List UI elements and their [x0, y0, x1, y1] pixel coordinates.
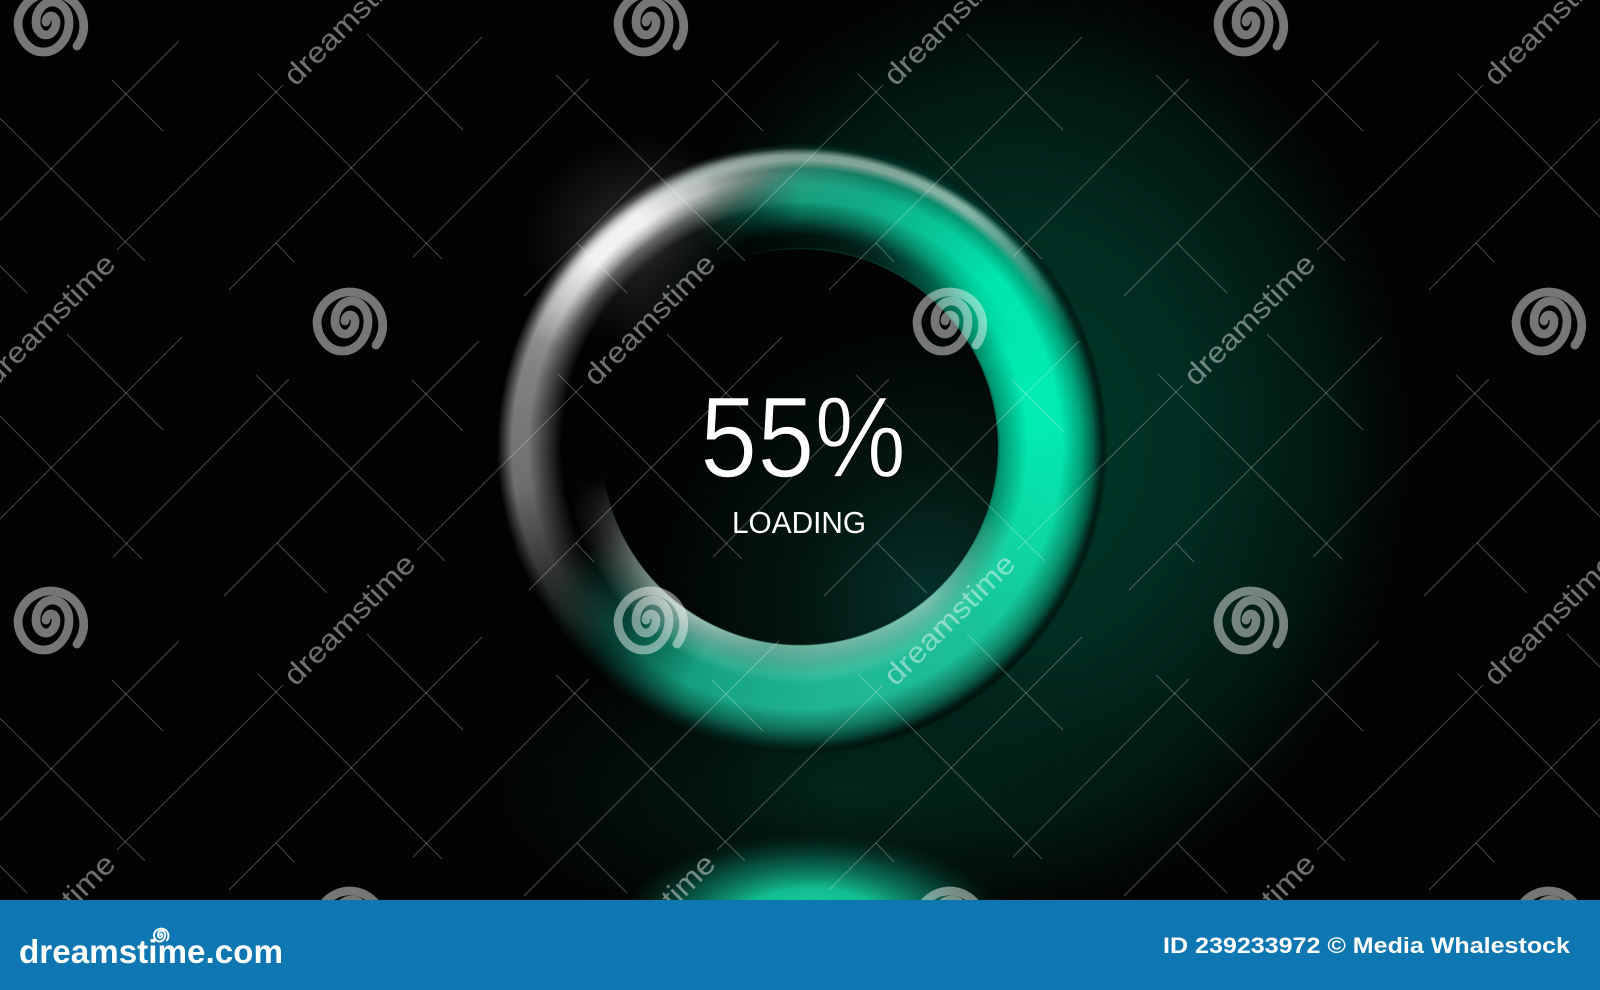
watermark text: dreamstime [578, 848, 722, 990]
watermark text: dreamstime [1178, 248, 1322, 392]
footer logo: dreamstime.com [19, 933, 283, 970]
watermark text: dreamstime [1178, 848, 1322, 990]
loading label: LOADING [732, 505, 866, 540]
inner shading of arc [669, 203, 1000, 352]
watermark text: dreamstime [878, 548, 1022, 692]
grey remaining arc [498, 147, 863, 636]
inner edge highlight [582, 483, 1003, 681]
percentage value: 55% [700, 374, 906, 502]
ring outer shadow [804, 206, 1106, 750]
watermark text: dreamstime [578, 248, 722, 392]
footer banner [0, 900, 1600, 990]
watermark text: dreamstime [278, 548, 422, 692]
progress ring [498, 145, 1106, 750]
green progress arc [558, 146, 1103, 749]
white highlight streak [536, 176, 708, 338]
image credit: ID 239233972 © Media Whalestock [1163, 933, 1571, 958]
grey top rim [655, 148, 1061, 318]
